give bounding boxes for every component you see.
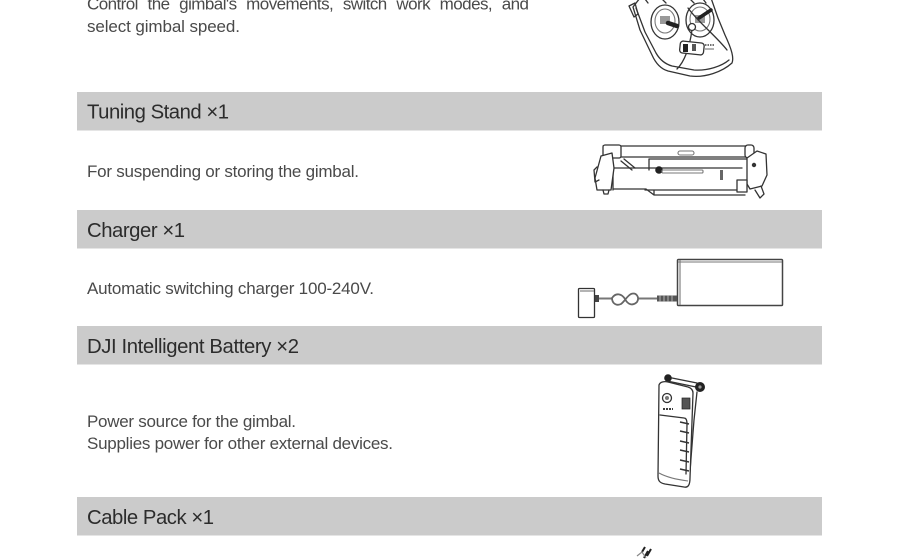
heading: Tuning Stand [77,92,822,130]
heading: Cable Pack: Cable Pack ×1 [87,507,214,529]
heading: DJI Intelligent Battery [77,326,822,364]
text block: battery description: Supplies power for other external devices. [87,434,393,453]
icon: remote controller [629,0,733,76]
text block: battery description [87,412,393,453]
text block: tuning stand description: For suspending or storing the gimbal. [87,162,359,181]
text block: charger description: Automatic switching charger 100-240V. [87,279,374,298]
text block: remote controller description: select gimbal speed. [87,17,240,36]
icon: battery [658,374,705,487]
heading: Charger [77,210,822,248]
heading: DJI Intelligent Battery: DJI Intelligent Battery ×2 [87,336,299,358]
heading: Cable Pack [77,497,822,536]
text block: battery description: Power source for the gimbal. [87,412,296,431]
heading: Tuning Stand: Tuning Stand ×1 [87,102,229,124]
heading: Charger: Charger ×1 [87,220,185,242]
text block: remote controller description [87,0,529,36]
icon: tuning stand [594,145,767,198]
icon: cable pack [637,547,651,558]
icon: charger [578,260,782,318]
